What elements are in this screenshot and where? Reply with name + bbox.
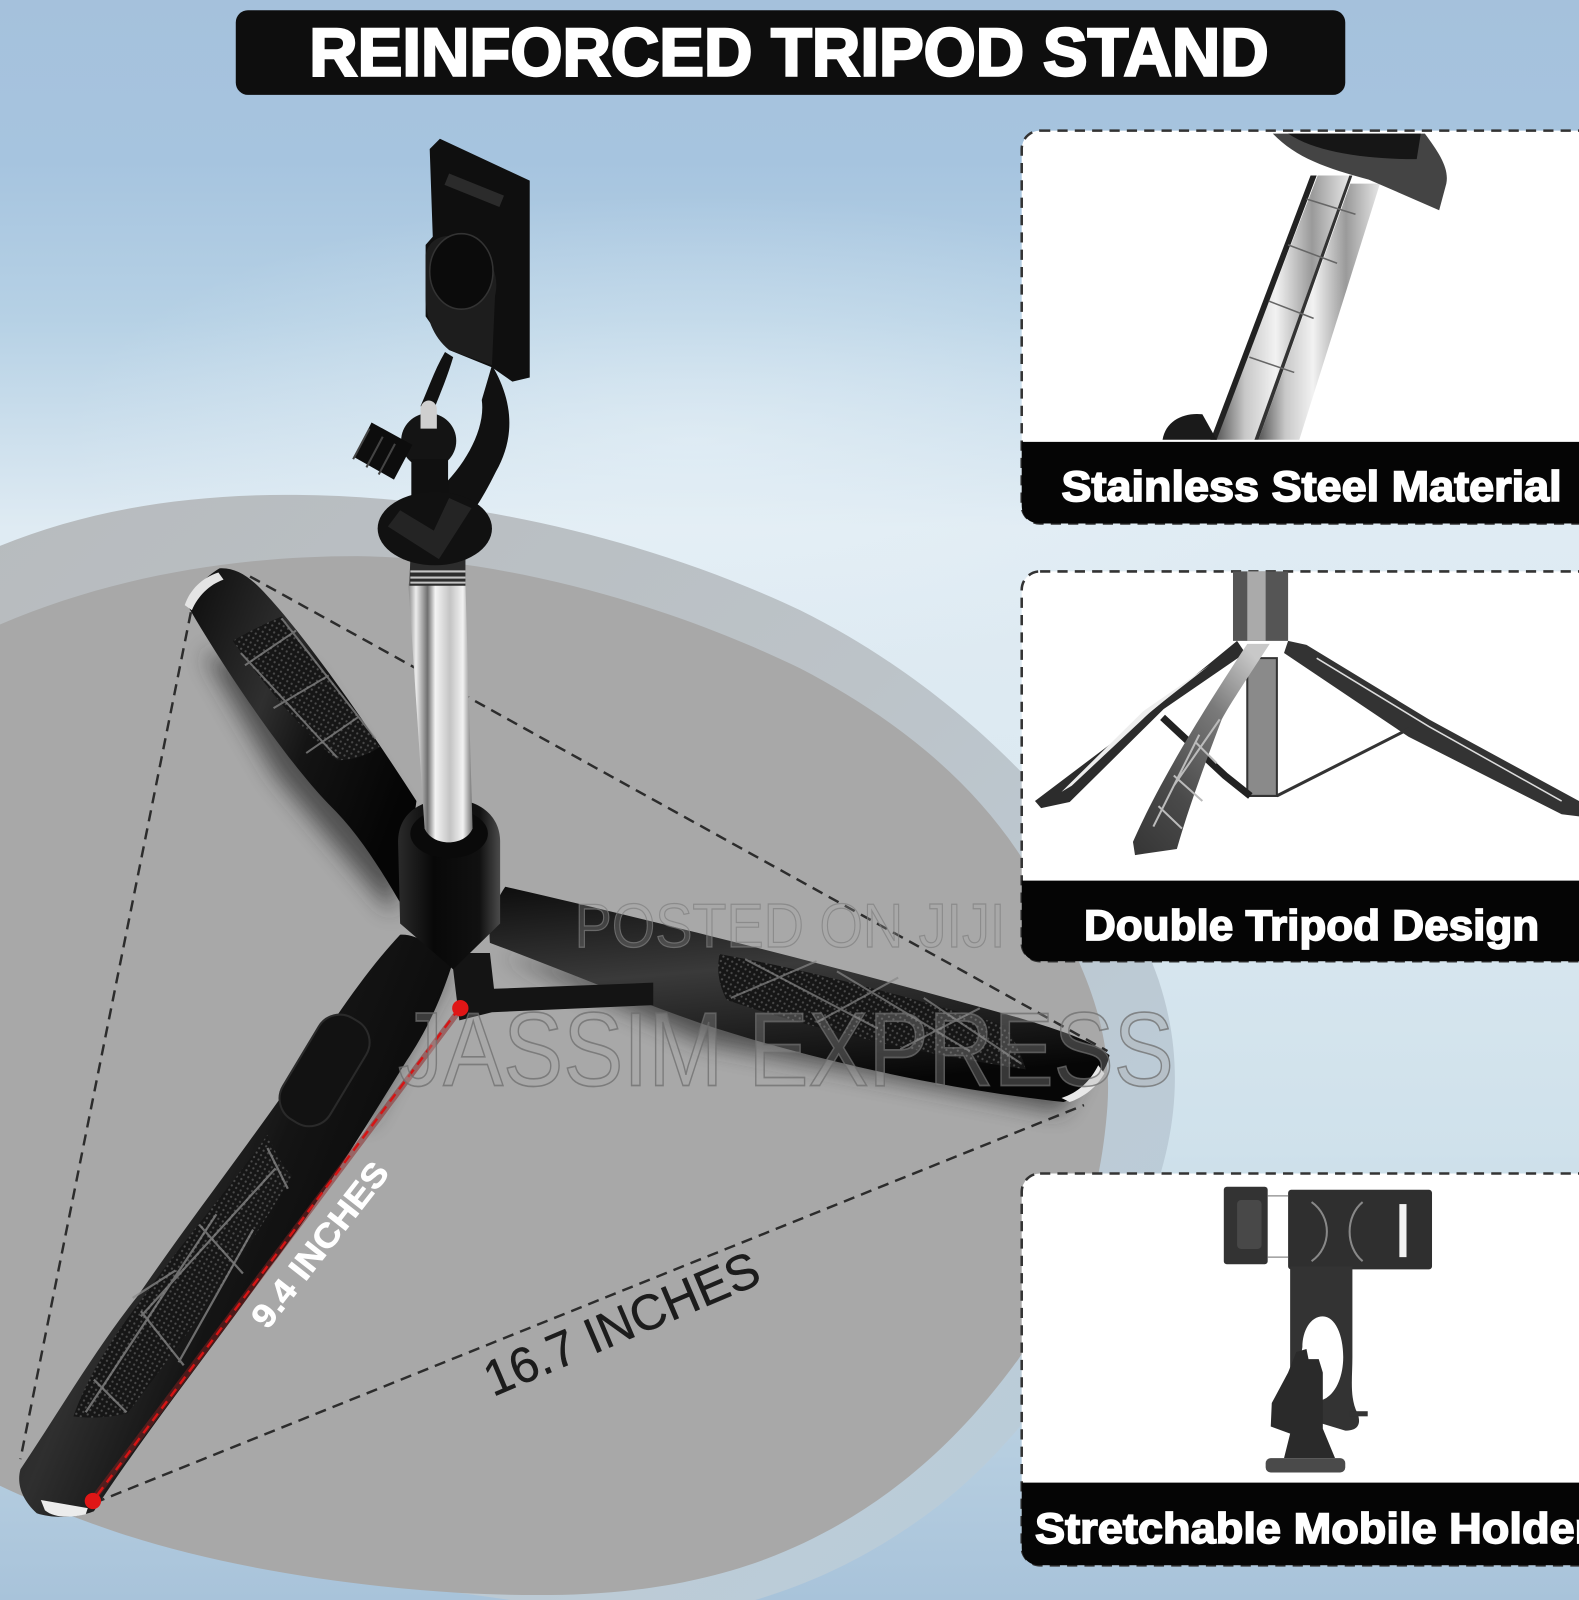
steel tubes illustration xyxy=(1163,134,1447,440)
tripod left leg xyxy=(1035,641,1245,808)
tube head disc xyxy=(1273,134,1447,210)
right leg grip xyxy=(718,954,1026,1069)
head body xyxy=(1271,1349,1335,1458)
panel: stretchable mobile holder xyxy=(1022,1173,1579,1565)
neck xyxy=(411,459,448,510)
outer floor disk xyxy=(0,495,1175,1600)
right leg xyxy=(490,887,1109,1102)
inner floor disk xyxy=(0,556,1108,1595)
clamp body xyxy=(1288,1190,1432,1269)
tripod product photo xyxy=(19,139,1109,1517)
holder arm xyxy=(421,352,509,518)
red dot top xyxy=(452,1000,468,1016)
red dashed measure xyxy=(93,1008,459,1501)
phone holder plate xyxy=(426,139,530,382)
caption: Double Tripod Design xyxy=(1084,902,1539,950)
back leg grip xyxy=(233,616,380,760)
title banner xyxy=(236,10,1345,95)
center collar xyxy=(398,799,500,969)
panel: double tripod design xyxy=(1022,571,1579,961)
stem with oval opening xyxy=(1290,1266,1359,1431)
lower brace xyxy=(451,953,653,1020)
front leg grip xyxy=(73,1135,292,1418)
caption bar xyxy=(1022,1483,1579,1565)
leg shadows xyxy=(204,653,1082,1122)
watermark: jassim express: JASSIM EXPRESS xyxy=(398,992,1174,1109)
side knob xyxy=(354,422,412,480)
head knob xyxy=(1356,1411,1368,1416)
front leg xyxy=(19,935,451,1517)
double tripod illustration xyxy=(1035,571,1579,855)
front leg tip xyxy=(41,1500,88,1517)
label: 9.4 inches: 9.4 INCHES xyxy=(245,1155,397,1336)
tube spring collar xyxy=(409,559,465,586)
mount disc xyxy=(378,492,492,565)
dashed line: front side xyxy=(94,1105,1084,1503)
red dot bottom xyxy=(85,1493,101,1509)
detached clamp xyxy=(1224,1187,1268,1264)
watermark: posted on jiji: POSTED ON JIJI xyxy=(575,892,1005,961)
caption bar xyxy=(1022,881,1579,961)
back leg xyxy=(185,568,416,906)
front clamp xyxy=(426,236,496,365)
steel telescopic tube xyxy=(408,584,473,842)
measurement guides xyxy=(20,577,1107,1503)
red length line xyxy=(85,1000,468,1509)
caption: Stretchable Mobile Holder xyxy=(1035,1505,1579,1553)
panel: stainless steel material xyxy=(1022,131,1579,523)
label: 16.7 inches: 16.7 INCHES xyxy=(475,1241,768,1407)
right leg tip xyxy=(1062,1065,1104,1102)
ball head and knob xyxy=(353,401,456,510)
caption: Stainless Steel Material xyxy=(1062,463,1562,511)
left brace xyxy=(1163,717,1250,796)
caption bar xyxy=(1022,442,1579,523)
dashed line: left side xyxy=(20,612,191,1459)
tripod right leg xyxy=(1284,641,1579,816)
silver screw xyxy=(421,401,437,429)
head base xyxy=(1266,1458,1345,1472)
tripod front leg xyxy=(1133,644,1270,855)
holder illustration xyxy=(1224,1187,1432,1472)
back leg tip xyxy=(185,572,224,610)
tripod center strut xyxy=(1247,658,1277,796)
right brace xyxy=(1277,729,1410,796)
tube base xyxy=(1163,414,1217,440)
power button xyxy=(270,1005,379,1135)
title text: REINFORCED TRIPOD STAND xyxy=(309,16,1269,91)
dashed line: back side xyxy=(250,577,1107,1051)
